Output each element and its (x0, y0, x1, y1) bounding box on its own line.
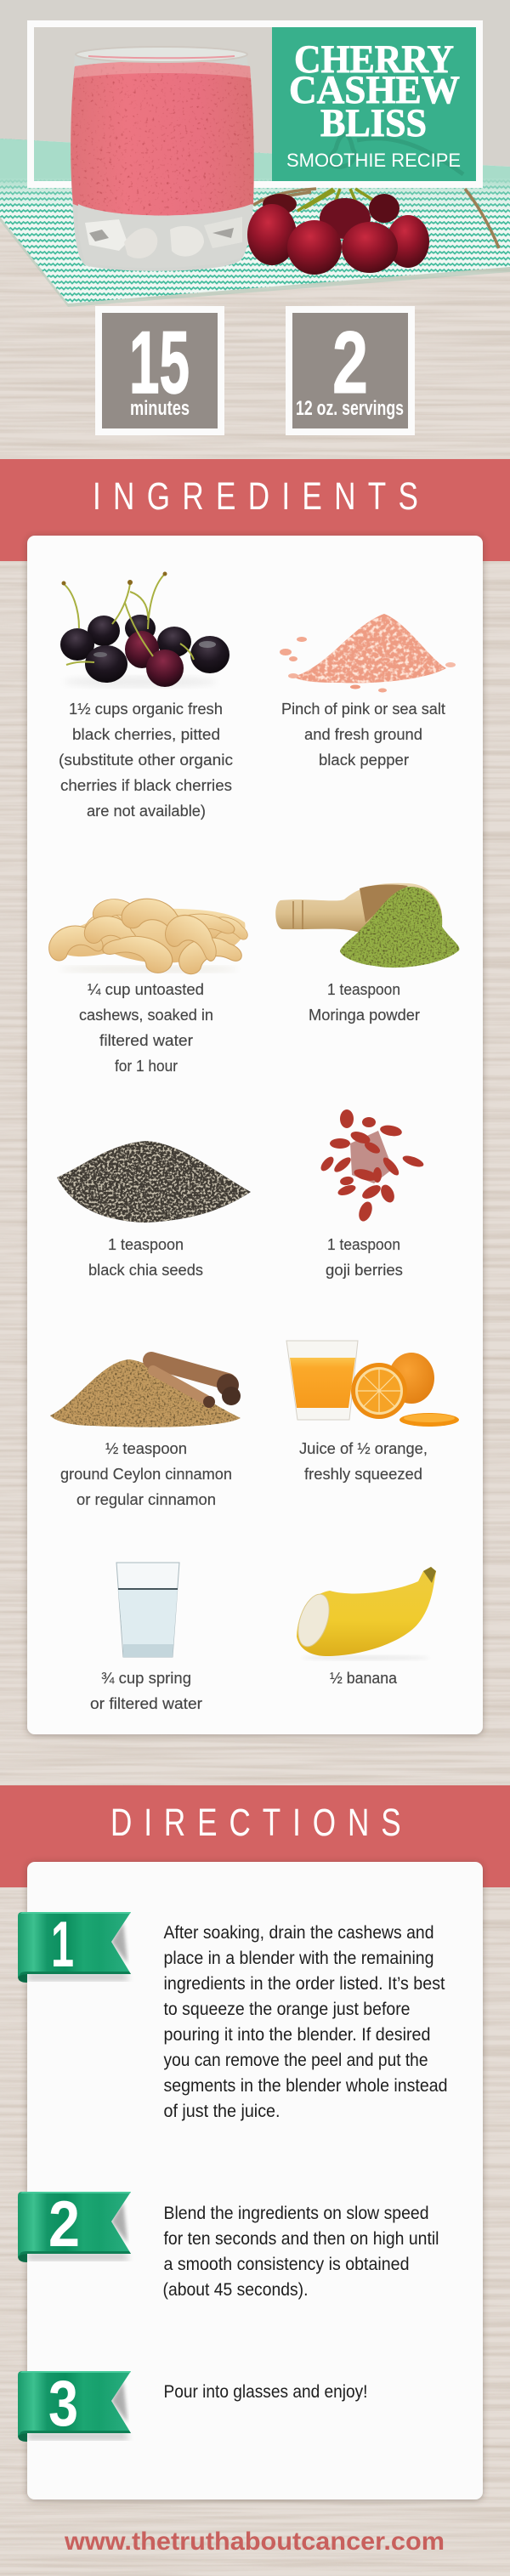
step 1 (18, 1909, 447, 2121)
caption: (substitute other organic (59, 751, 233, 769)
step 2 text: for ten seconds and then on high until (163, 2229, 439, 2249)
title block (272, 27, 476, 181)
caption: 1 teaspoon (108, 1235, 184, 1253)
step 1 text: of just the juice. (163, 2102, 280, 2121)
directions heading band (0, 1785, 510, 1887)
stat: 2 servings: 12 oz. servings (296, 397, 404, 420)
step 1 text: pouring it into the blender. If desired (163, 2025, 430, 2045)
title block: BLISS (320, 101, 427, 145)
caption: 1 teaspoon (327, 980, 400, 998)
caption: 1 teaspoon (327, 1235, 400, 1253)
icon: goji berries (319, 1109, 425, 1223)
caption: are not available) (87, 802, 206, 820)
ribbon number 3: 3 (48, 2368, 78, 2440)
icon: black cherries (60, 571, 230, 688)
icon: cashews (48, 893, 251, 976)
caption: freshly squeezed (304, 1465, 422, 1483)
ribbon number 1 (18, 1909, 131, 1983)
caption: Moringa powder (309, 1006, 420, 1024)
subtitle: SMOOTHIE RECIPE (286, 150, 461, 171)
caption: Juice of ½ orange, (299, 1439, 428, 1457)
ingredients heading band: INGREDIENTS (93, 474, 418, 518)
caption: black cherries, pitted (72, 725, 220, 743)
icon: moringa powder scoop (275, 883, 459, 967)
step 2 text: Blend the ingredients on slow speed (163, 2204, 428, 2223)
caption: filtered water (99, 1031, 193, 1049)
step 3 (18, 2368, 367, 2442)
hero photo: smoothie glass, cloth and cherries (0, 0, 510, 307)
panel: ingredients (27, 536, 483, 1734)
cherries (247, 189, 429, 275)
caption (309, 980, 420, 1024)
step 2 text: a smooth consistency is obtained (163, 2255, 410, 2274)
icon: banana half (292, 1567, 436, 1660)
ingredients heading band (0, 459, 510, 561)
cherry stems (298, 189, 393, 214)
caption (59, 700, 233, 820)
ingredient: goji (319, 1109, 425, 1279)
ingredient: cinnamon (50, 1359, 241, 1508)
caption (90, 1669, 202, 1712)
caption: Pinch of pink or sea salt (281, 700, 445, 718)
stat: 2 servings: 2 (332, 314, 368, 412)
caption: or regular cinnamon (76, 1490, 216, 1508)
caption: cherries if black cherries (60, 776, 232, 794)
title text: CHERRY (294, 37, 454, 82)
step 1 text: to squeeze the orange just before (163, 2000, 410, 2019)
stat: 15 minutes: minutes (130, 397, 190, 420)
step 2 text (163, 2204, 439, 2300)
panel: directions (18, 1862, 483, 2499)
caption: and fresh ground (304, 725, 422, 743)
ingredient: black cherries (59, 571, 233, 820)
wall backdrop (0, 0, 510, 170)
ribbon number 1: 1 (51, 1909, 74, 1981)
ribbon number 3 (18, 2368, 131, 2442)
title block: CASHEW (289, 68, 460, 112)
ingredient: orange juice (286, 1341, 459, 1483)
caption (88, 1235, 203, 1279)
step 1 text: you can remove the peel and put the (163, 2051, 428, 2070)
caption: ½ banana (330, 1669, 398, 1687)
title frame (31, 24, 479, 184)
step 2 text: (about 45 seconds). (163, 2280, 308, 2300)
caption: black pepper (319, 751, 409, 769)
ribbon number 2: 2 (48, 2188, 80, 2261)
twine knot seen through title panel (327, 134, 463, 174)
ribbon number 2 (18, 2188, 131, 2262)
step 3 text: Pour into glasses and enjoy! (163, 2382, 367, 2402)
caption (326, 1235, 403, 1279)
stat: 15 minutes (99, 309, 221, 432)
caption: ¼ cup untoasted (88, 980, 204, 998)
step 1 text (163, 1923, 447, 2121)
step 1 text: ingredients in the order listed. It’s best (163, 1974, 445, 1994)
stat: 2 servings (289, 309, 411, 432)
icon: cinnamon powder and sticks (50, 1359, 241, 1427)
caption: 1½ cups organic fresh (69, 700, 223, 718)
icon: chia seed pile (57, 1141, 251, 1223)
caption: or filtered water (90, 1694, 202, 1712)
caption: ground Ceylon cinnamon (60, 1465, 232, 1483)
caption: goji berries (326, 1261, 403, 1279)
footer url: www.thetruthaboutcancer.com (64, 2528, 445, 2556)
ingredient: chia (57, 1141, 251, 1279)
smoothie glass (71, 47, 254, 271)
stat: 15 minutes: 15 (129, 314, 190, 412)
step 2 (18, 2188, 439, 2300)
caption: ½ teaspoon (105, 1439, 187, 1457)
step 1 text: place in a blender with the remaining (163, 1949, 434, 1968)
icon: orange juice and oranges (286, 1341, 459, 1427)
teal checked cloth (0, 139, 510, 307)
caption (79, 980, 213, 1075)
caption (60, 1439, 232, 1508)
caption (281, 700, 445, 769)
icon: glass of water (116, 1563, 179, 1657)
caption (299, 1439, 428, 1483)
ingredient: water (90, 1563, 202, 1712)
caption: black chia seeds (88, 1261, 203, 1279)
ingredient: salt (280, 614, 456, 769)
caption: for 1 hour (115, 1057, 178, 1075)
ingredient: banana (292, 1567, 436, 1687)
caption: ¾ cup spring (101, 1669, 191, 1687)
icon: salt pile (280, 614, 456, 692)
ingredient: cashews (48, 893, 251, 1075)
directions heading band: DIRECTIONS (110, 1801, 401, 1844)
caption: cashews, soaked in (79, 1006, 213, 1024)
ingredient: moringa (275, 883, 459, 1024)
step 1 text: After soaking, drain the cashews and (163, 1923, 434, 1943)
cherry twine (253, 189, 499, 248)
step 1 text: segments in the blender whole instead (163, 2076, 447, 2096)
